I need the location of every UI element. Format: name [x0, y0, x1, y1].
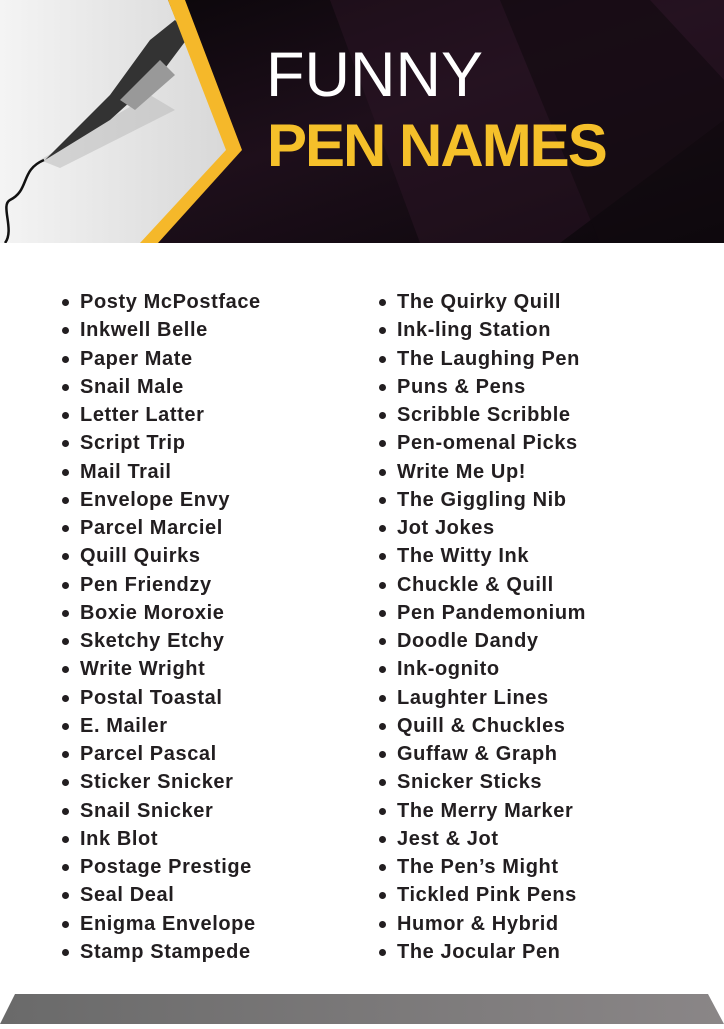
list: left column — [62, 291, 261, 963]
list: left column: Script Trip — [80, 432, 186, 454]
list: right column: Puns & Pens — [397, 376, 526, 398]
title line 1: FUNNY — [266, 40, 483, 110]
list: left column: Sticker Snicker — [80, 771, 234, 793]
list: right column: Jest & Jot — [397, 828, 499, 850]
list: left column: Enigma Envelope — [80, 912, 256, 934]
list: left column: Stamp Stampede — [80, 941, 251, 963]
list: left column: Boxie Moroxie — [80, 602, 224, 624]
list: left column: Quill Quirks — [80, 545, 201, 567]
list: right column: The Quirky Quill — [397, 291, 561, 313]
list: right column: Quill & Chuckles — [397, 715, 566, 737]
list: left column: E. Mailer — [80, 715, 168, 737]
list: right column: The Merry Marker — [397, 800, 573, 822]
yellow chevron — [140, 0, 242, 243]
list: right column: Ink-ling Station — [397, 319, 551, 341]
list: right column — [379, 291, 586, 963]
list: left column: Mail Trail — [80, 460, 172, 482]
list: right column: The Giggling Nib — [397, 489, 567, 511]
list: right column: Laughter Lines — [397, 686, 549, 708]
list: right column: Write Me Up! — [397, 460, 526, 482]
list: left column: Pen Friendzy — [80, 574, 212, 596]
title line 2: PEN NAMES — [267, 112, 606, 179]
list: left column: Snail Male — [80, 376, 184, 398]
list: left column: Parcel Marciel — [80, 517, 223, 539]
list: right column: Snicker Sticks — [397, 771, 542, 793]
list: left column: Postal Toastal — [80, 686, 223, 708]
photo: pen writing — [0, 0, 228, 243]
list: right column: Ink-ognito — [397, 658, 500, 680]
header banner — [0, 0, 724, 243]
list: right column: Pen Pandemonium — [397, 602, 586, 624]
list: left column: Write Wright — [80, 658, 205, 680]
title — [266, 40, 606, 179]
list: left column: Parcel Pascal — [80, 743, 217, 765]
list: left column: Inkwell Belle — [80, 319, 208, 341]
list: left column: Posty McPostface — [80, 291, 261, 313]
list: left column: Paper Mate — [80, 348, 193, 370]
list: right column: The Jocular Pen — [397, 941, 560, 963]
footer bar — [0, 994, 724, 1024]
list: right column: Humor & Hybrid — [397, 912, 559, 934]
list: right column: The Laughing Pen — [397, 348, 580, 370]
list: left column: Snail Snicker — [80, 800, 213, 822]
list: right column: The Witty Ink — [397, 545, 529, 567]
list: right column: Chuckle & Quill — [397, 574, 554, 596]
list: right column: Jot Jokes — [397, 517, 495, 539]
list: left column: Sketchy Etchy — [80, 630, 225, 652]
list: left column: Ink Blot — [80, 828, 158, 850]
list: right column: Doodle Dandy — [397, 630, 539, 652]
list: right column: Pen-omenal Picks — [397, 432, 578, 454]
list: left column: Letter Latter — [80, 404, 204, 426]
list: left column: Seal Deal — [80, 884, 174, 906]
list: right column: Guffaw & Graph — [397, 743, 558, 765]
list: left column: Postage Prestige — [80, 856, 252, 878]
list: left column: Envelope Envy — [80, 489, 230, 511]
list: right column: Scribble Scribble — [397, 404, 571, 426]
list: right column: Tickled Pink Pens — [397, 884, 577, 906]
list: right column: The Pen’s Might — [397, 856, 559, 878]
